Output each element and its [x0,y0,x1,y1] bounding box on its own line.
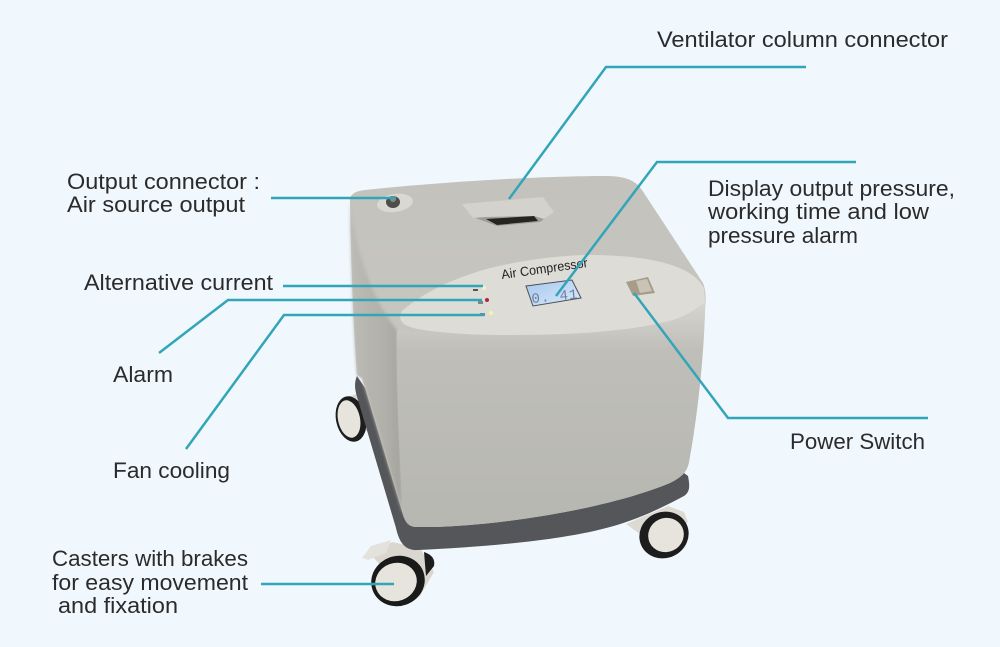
line: alternating current [283,285,483,287]
label: display: pressure alarm [708,223,858,248]
line: fan cooling [186,315,484,449]
label: display [707,176,955,248]
line: power switch [634,293,928,418]
label: casters: and fixation [58,593,178,618]
line: output connector [271,197,396,199]
label: alternative current: Alternative current [84,270,273,295]
LCD display: 0. 41 [531,287,579,308]
front caster with brake [362,540,434,614]
line: ventilator column connector [509,67,806,199]
label: output connector: Output connector : [67,169,260,194]
LCD display [526,280,581,308]
label: casters: for easy movement [52,570,248,595]
leader lines [159,67,928,584]
label: power switch: Power Switch [790,429,925,454]
label: display: working time and low [707,199,929,224]
label: alarm: Alarm [113,362,173,387]
indicator lights [473,286,493,316]
label: casters [52,546,248,618]
left side panel [350,200,403,515]
control panel [400,255,705,335]
base tray [355,376,689,550]
label: display: Display output pressure, [708,176,955,201]
output connector [376,192,414,214]
body silhouette [350,176,706,527]
label: fan cooling: Fan cooling [113,458,230,483]
rear right caster [626,504,696,566]
rear left caster [332,392,370,445]
ventilator column connector [462,197,554,226]
label: ventilator column connector: Ventilator column connector [657,27,948,52]
product label: Air Compressor [500,255,589,282]
power switch [626,277,655,296]
label: output connector [67,169,260,217]
air compressor machine [332,176,706,614]
line: alarm [159,300,482,353]
line: casters [261,583,394,585]
front panel [397,302,705,527]
label: output connector: Air source output [67,192,245,217]
label: casters: Casters with brakes [52,546,248,571]
line: display [556,162,856,296]
